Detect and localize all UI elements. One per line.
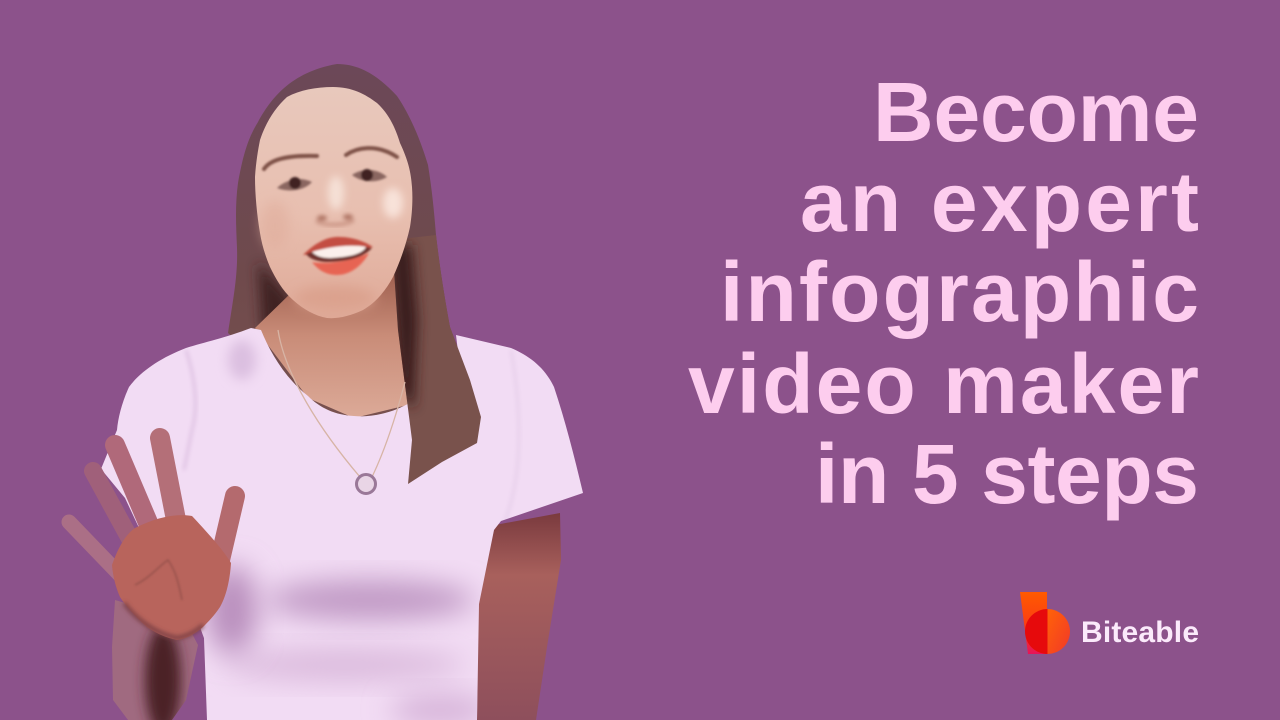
heading line 1: Become xyxy=(873,65,1199,159)
right sleeve seam xyxy=(505,350,519,521)
mouth interior xyxy=(306,246,372,262)
palm crease xyxy=(135,560,182,600)
forearm base xyxy=(112,600,198,720)
palm xyxy=(112,515,231,640)
lock base xyxy=(394,235,481,484)
heading xyxy=(688,65,1199,521)
heading line 5: in 5 steps xyxy=(815,427,1199,521)
upper lip xyxy=(303,237,373,255)
heading line 2: an expert xyxy=(800,155,1199,249)
logo stem xyxy=(1020,592,1047,654)
person: face xyxy=(255,87,412,318)
person: mouth xyxy=(303,237,373,275)
person: front hair lock xyxy=(394,235,481,484)
left nostril xyxy=(317,216,327,220)
logo bowl right half xyxy=(1048,609,1070,654)
person: dark hair under jaw xyxy=(258,262,292,330)
bottom right shadow xyxy=(390,694,490,720)
right nostril xyxy=(343,214,353,220)
left cheek shade xyxy=(261,201,289,249)
left iris xyxy=(289,177,301,189)
forearm dark shadow xyxy=(145,625,181,720)
fingers xyxy=(69,438,235,575)
person: t-shirt xyxy=(101,328,583,720)
logo: Biteable xyxy=(1020,592,1199,654)
waist shading xyxy=(225,649,465,681)
person: back hair xyxy=(228,64,481,484)
person: raised hand xyxy=(69,438,235,640)
person: nose shadow xyxy=(316,214,354,225)
person: eyebrows xyxy=(264,148,397,169)
sleeve seam xyxy=(184,350,195,470)
heading line 3: infographic xyxy=(720,245,1199,339)
right eye xyxy=(352,170,387,181)
right iris xyxy=(361,169,373,181)
logo bowl left half xyxy=(1025,609,1048,654)
chin shade xyxy=(295,286,375,310)
left eye xyxy=(277,179,312,190)
person: face highlights and shading xyxy=(261,176,403,310)
cheek glow xyxy=(383,188,403,218)
chest fold shadow xyxy=(265,580,475,620)
under nose xyxy=(316,220,354,225)
person: necklace xyxy=(278,330,405,494)
person: left forearm xyxy=(112,600,198,720)
presenter photo xyxy=(69,64,583,720)
shoulder shadow xyxy=(228,340,256,380)
nose bridge glow xyxy=(328,176,344,210)
torso left shadow xyxy=(206,565,258,655)
logo wordmark: Biteable xyxy=(1081,616,1199,649)
shirt shading xyxy=(184,340,519,720)
pendant xyxy=(356,474,376,494)
lower lip xyxy=(312,253,369,275)
person: neck and chest xyxy=(255,268,420,418)
teeth xyxy=(312,246,366,258)
logo mark xyxy=(1020,592,1070,654)
shirt shape xyxy=(101,328,583,720)
person: eyes xyxy=(277,169,387,190)
person: right arm xyxy=(470,513,561,720)
lock dark inner streak xyxy=(390,245,418,410)
palm lower shade xyxy=(124,603,203,638)
heading line 4: video maker xyxy=(688,337,1199,431)
